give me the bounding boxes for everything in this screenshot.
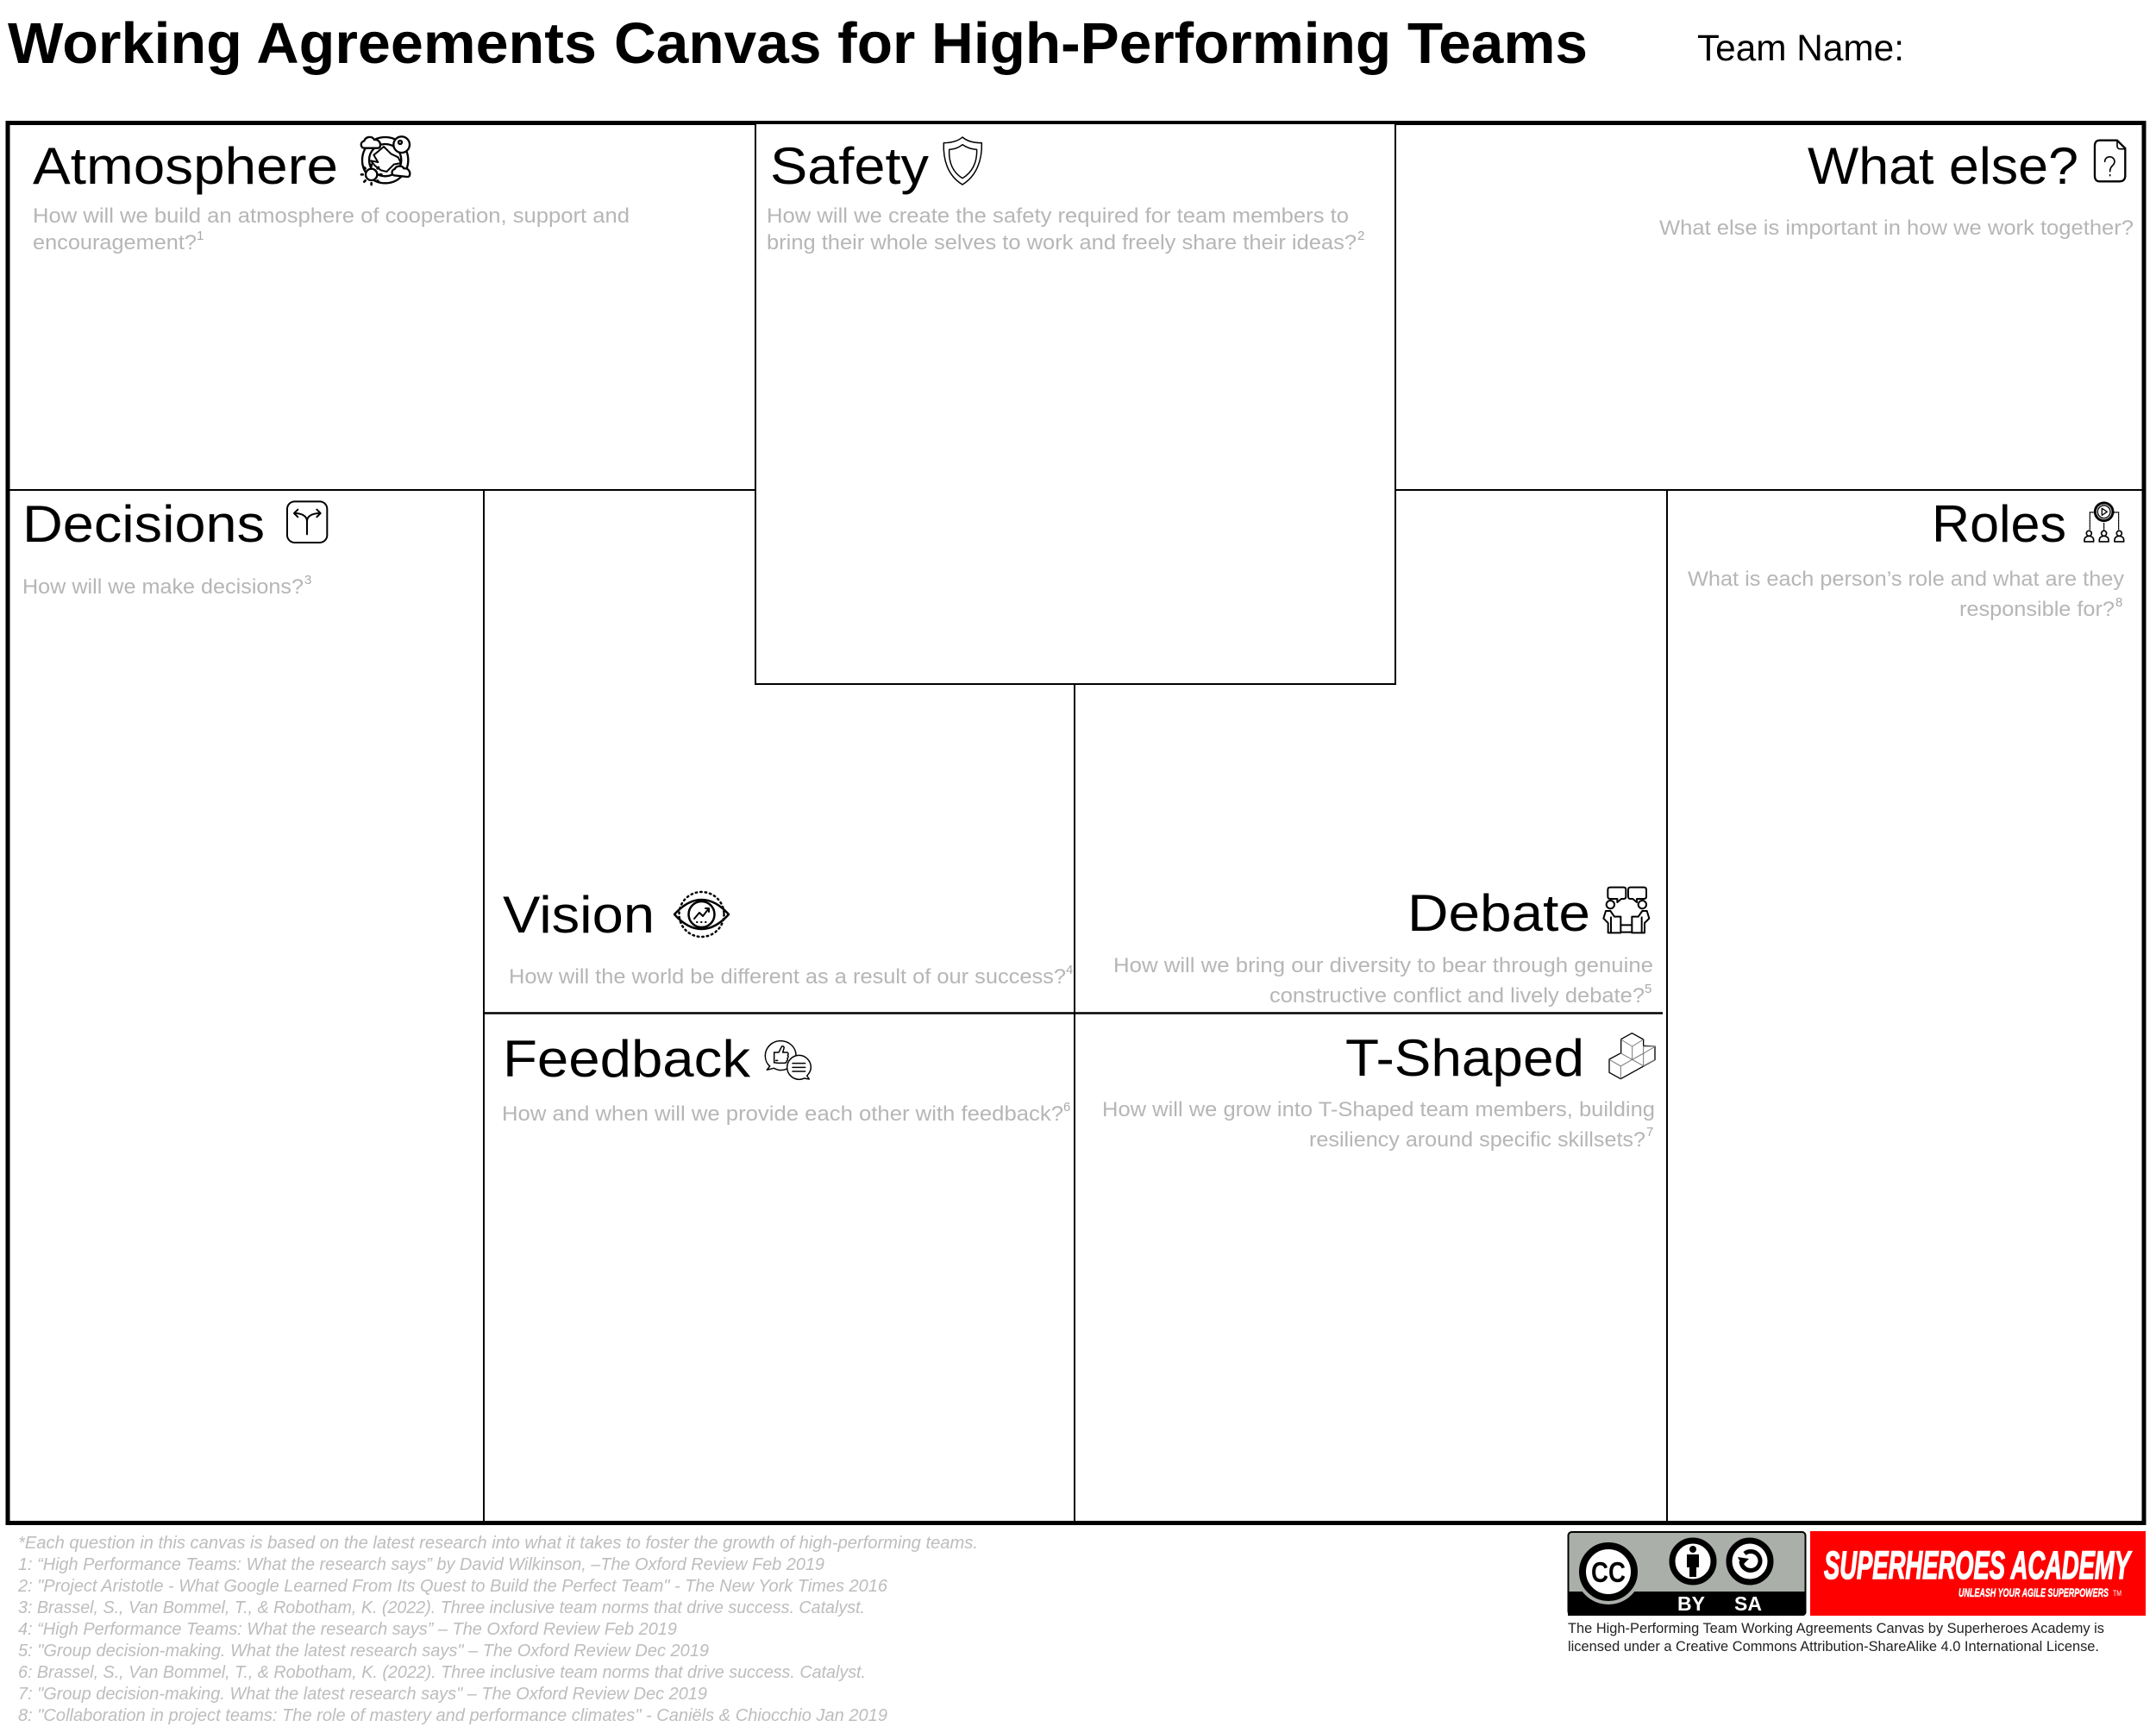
icon: two people debating — [1603, 888, 1649, 932]
roles question: What is each person’s role and what are they — [1688, 568, 2124, 591]
icon: globe with clouds — [361, 136, 410, 185]
t-shaped question — [1102, 1098, 1655, 1152]
creative commons BY-SA badge: BY — [1677, 1592, 1705, 1615]
team name label: Team Name: — [1697, 28, 1904, 69]
footnotes: 4: “High Performance Teams: What the research says” – The Oxford Review Feb 2019 — [18, 1620, 677, 1639]
panel: decisions — [22, 495, 327, 599]
footnotes: 2: "Project Aristotle - What Google Learned From Its Quest to Build the Perfect Team" - The New York Times 2016 — [17, 1577, 888, 1596]
panel: debate — [1113, 884, 1653, 1008]
debate question: How will we bring our diversity to bear through genuine — [1113, 954, 1653, 977]
roles question: 8 — [2115, 595, 2122, 610]
safety question: How will we create the safety required for team members to — [767, 204, 1349, 228]
roles question: responsible for? — [1959, 598, 2115, 621]
atmosphere heading: Atmosphere — [33, 137, 338, 195]
safety question — [767, 204, 1364, 254]
footnotes: 8: "Collaboration in project teams: The role of mastery and performance climates" - Caniëls & Chiocchio Jan 2019 — [18, 1706, 887, 1725]
panel: what else — [1659, 137, 2134, 240]
icon: gear with people — [2084, 503, 2124, 542]
panel: roles — [1688, 495, 2124, 621]
atmosphere question: How will we build an atmosphere of cooperation, support and — [33, 204, 630, 228]
debate question: 5 — [1645, 982, 1651, 996]
what else question: What else is important in how we work together? — [1659, 217, 2134, 240]
vision question: How will the world be different as a result of our success? — [509, 965, 1066, 989]
safety heading: Safety — [770, 137, 929, 195]
icon: thumbs up speech bubbles — [765, 1041, 811, 1079]
title: Working Agreements — [8, 11, 597, 76]
license statement: The High-Performing Team Working Agreements Canvas by Superheroes Academy is — [1568, 1620, 2104, 1636]
footnotes: 7: "Group decision-making. What the latest research says" – The Oxford Review Dec 2019 — [18, 1685, 707, 1704]
panel: atmosphere — [33, 136, 630, 254]
roles question — [1688, 568, 2124, 621]
decisions heading: Decisions — [22, 495, 265, 553]
feedback heading: Feedback — [503, 1030, 751, 1088]
t-shaped question: resiliency around specific skillsets? — [1309, 1128, 1645, 1152]
superheroes academy logo: TM — [2113, 1589, 2122, 1598]
debate question: constructive conflict and lively debate? — [1269, 984, 1645, 1008]
debate heading: Debate — [1407, 884, 1590, 942]
footnotes: 5: "Group decision-making. What the latest research says" – The Oxford Review Dec 2019 — [18, 1642, 709, 1661]
creative commons BY-SA badge: CC — [1591, 1556, 1626, 1588]
decisions question: How will we make decisions? — [22, 575, 304, 599]
footnotes: 1: “High Performance Teams: What the research says” by David Wilkinson, –The Oxford Review Feb 2019 — [18, 1555, 824, 1574]
footnotes: *Each question in this canvas is based on the latest research into what it takes to foster the growth of high-performing teams. — [18, 1534, 978, 1553]
t-shaped question: How will we grow into T-Shaped team members, building — [1102, 1098, 1655, 1121]
safety question: bring their whole selves to work and freely share their ideas? — [767, 231, 1357, 254]
decisions question: 3 — [304, 573, 311, 587]
panel: feedback — [502, 1030, 1070, 1126]
what else heading: What else? — [1808, 137, 2078, 195]
footnotes — [17, 1534, 978, 1725]
icon: forked arrow — [287, 501, 327, 543]
feedback question: 6 — [1063, 1100, 1070, 1115]
footnotes: 6: Brassel, S., Van Bommel, T., & Robotham, K. (2022). Three inclusive team norms that drive success. Catalyst. — [18, 1663, 866, 1682]
t-shaped question: 7 — [1646, 1125, 1653, 1140]
atmosphere question: encouragement? — [33, 231, 197, 254]
superheroes academy logo — [1810, 1531, 2146, 1616]
atmosphere question — [33, 204, 630, 254]
icon: T-shaped isometric blocks — [1609, 1033, 1655, 1079]
t-shaped heading: T-Shaped — [1345, 1029, 1584, 1087]
creative commons BY-SA badge — [1568, 1532, 1806, 1616]
icon: document with question mark — [2095, 141, 2125, 181]
atmosphere question: 1 — [197, 229, 204, 243]
icon: shield — [943, 137, 981, 185]
panel: safety — [767, 137, 1364, 254]
panel: t-shaped — [1102, 1029, 1655, 1152]
title: Canvas for High-Performing Teams — [614, 11, 1588, 76]
debate question — [1113, 954, 1653, 1008]
roles heading: Roles — [1932, 495, 2066, 553]
license statement: licensed under a Creative Commons Attribution-ShareAlike 4.0 International License. — [1568, 1638, 2099, 1655]
icon: eye with chart — [674, 892, 729, 937]
footnotes: 3: Brassel, S., Van Bommel, T., & Robotham, K. (2022). Three inclusive team norms that drive success. Catalyst. — [18, 1598, 865, 1617]
title — [8, 11, 1588, 76]
license statement — [1568, 1620, 2104, 1655]
feedback question: How and when will we provide each other with feedback? — [502, 1102, 1063, 1126]
vision question: 4 — [1066, 963, 1073, 977]
creative commons BY-SA badge: SA — [1734, 1592, 1762, 1615]
panel: vision — [503, 886, 1073, 989]
vision heading: Vision — [503, 886, 655, 944]
safety question: 2 — [1357, 229, 1364, 243]
